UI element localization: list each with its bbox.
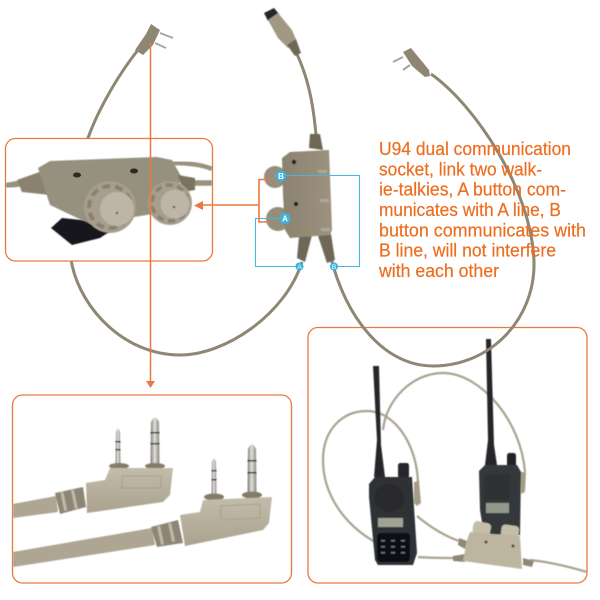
- description text: U94 dual communication: [379, 138, 571, 159]
- strain relief right: [178, 175, 195, 192]
- description text: B line, will not interfere: [379, 240, 556, 261]
- knob B close-up: [148, 181, 192, 225]
- strain relief left: [17, 170, 50, 195]
- arrow: buttons to button close-up: [194, 180, 270, 222]
- arrow: plug to plug close-up: [146, 43, 155, 388]
- mounting clip: [51, 218, 115, 245]
- cable: left line A: [70, 50, 302, 355]
- plug: headset connector: [264, 8, 301, 56]
- radio: rear walkie-talkie: [479, 339, 526, 535]
- description text: ie-talkies, A button com-: [379, 179, 566, 200]
- module on radios: [453, 520, 534, 569]
- lower cables to module: [417, 516, 587, 572]
- module: U94 socket: [264, 134, 335, 263]
- radio: front walkie-talkie: [369, 366, 421, 565]
- callout lines: blue A and B: [256, 176, 360, 266]
- badge: A on button: A: [282, 214, 288, 224]
- panel: plug close-up: [12, 395, 292, 583]
- plug: right radio connector: [393, 48, 430, 77]
- badge: B on button: [276, 170, 286, 182]
- panel: radios in use: [308, 328, 587, 583]
- rear cables of close-up: [6, 163, 212, 186]
- screws: [73, 168, 138, 178]
- badge: B on line: B: [332, 264, 336, 271]
- front plug close-up: [13, 444, 272, 567]
- description text: with each other: [378, 260, 499, 281]
- badge: B on button: B: [278, 172, 284, 181]
- rear plug close-up: [13, 418, 173, 518]
- badge: A on button: [280, 213, 290, 224]
- description text: [378, 138, 586, 281]
- cable loop of front radio: [323, 411, 418, 542]
- cable: top connector lead: [296, 52, 316, 135]
- close-up body: [38, 157, 182, 224]
- badge: B on line: [330, 262, 338, 271]
- cable: right line B: [329, 74, 534, 366]
- badge: A on line: A: [297, 264, 302, 271]
- description text: socket, link two walk-: [379, 158, 542, 179]
- cable inside radio panel, rear: [383, 373, 525, 472]
- knob A close-up: [84, 181, 136, 233]
- description text: municates with A line, B: [379, 199, 561, 220]
- description text: button communicates with: [379, 219, 586, 240]
- badge: A on line: [296, 262, 304, 271]
- panel: button close-up: [6, 138, 212, 261]
- plug: left radio connector: [135, 24, 173, 55]
